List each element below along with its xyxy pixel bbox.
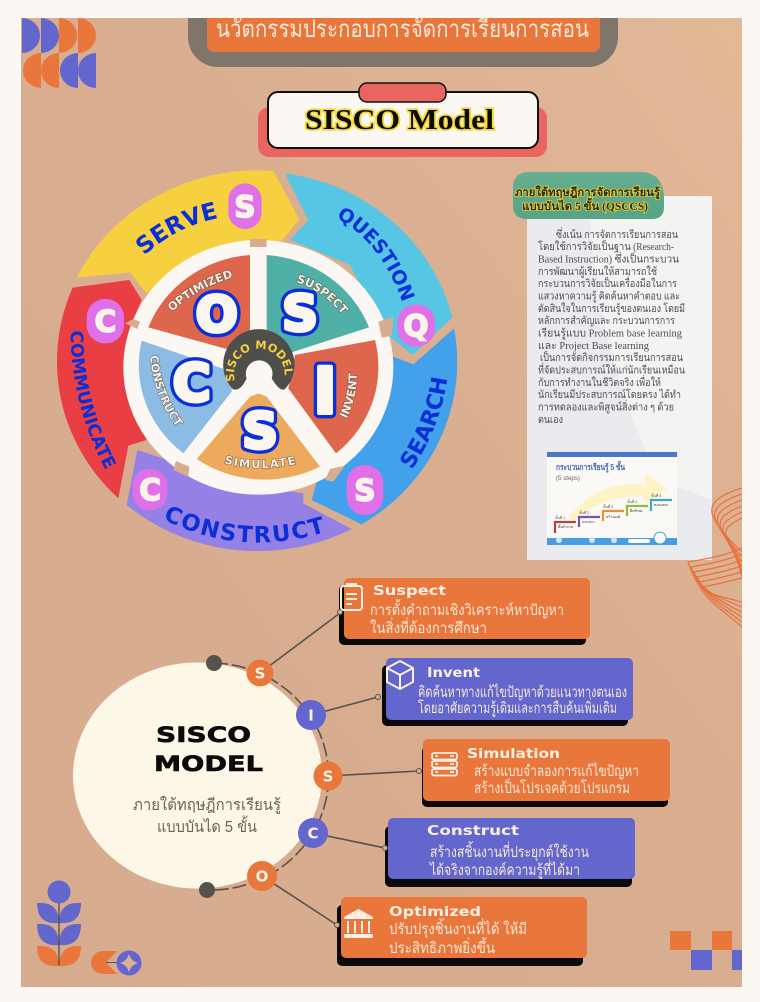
letter I: I	[313, 354, 337, 428]
title banner: นวัตกรรมประกอบการจัดการเรียนการสอน	[216, 16, 589, 43]
figure: 5 steps learning process: (5 steps)	[556, 475, 580, 482]
card: Optimized: ประสิทธิภาพยิ่งขึ้น	[389, 937, 495, 957]
card: Construct: ได้จริงจากองค์ความรู้ที่ได้มา	[429, 859, 580, 879]
panel heading: แบบบันได 5 ขั้น (QSCCS)	[522, 197, 648, 213]
dot bottom	[199, 882, 215, 898]
letter O: O	[196, 285, 238, 343]
arrow: serve	[77, 170, 299, 293]
circle subtitle: แบบบันได 5 ขั้น	[157, 815, 257, 836]
card: Simulation: Simulation	[467, 747, 560, 762]
figure: 5 steps learning process: ฝึกทักษะ	[630, 509, 643, 513]
panel body text: และ Project Base learning	[538, 341, 650, 352]
slice: simulate	[197, 393, 320, 480]
letter C: C	[173, 354, 211, 414]
hub	[223, 329, 294, 390]
icon: server	[432, 753, 457, 776]
card: Suspect: ในสิ่งที่ต้องการศึกษา	[370, 617, 487, 637]
figure: 5 steps learning process: ขั้นที่ 2	[579, 510, 589, 515]
SISCO wheel diagram	[56, 170, 458, 551]
pill C construct: C	[139, 473, 161, 507]
connector lines	[260, 613, 419, 925]
decoration: half circles top-left	[22, 18, 96, 88]
arrow: construct	[127, 450, 352, 551]
panel body text: แสวงหาความรู้ คิดค้นหาคำตอบ และ	[538, 290, 680, 302]
outer label question: QUESTION	[339, 208, 415, 301]
pill Q	[397, 304, 435, 347]
node O	[247, 861, 277, 891]
panel: QSCCS explanation	[513, 172, 712, 560]
card: Invent: โดยอาศัยความรู้เดิมและการสืบค้นเพิ่มเติม	[418, 697, 617, 717]
node C	[298, 818, 328, 848]
label construct inner: CONSTRUCT	[150, 355, 184, 426]
figure: 5 steps learning process: ขั้นที่ 3	[603, 504, 613, 509]
outer label search: SEARCH	[400, 377, 448, 468]
panel body text: กระบวนการวิจัยเป็นเครื่องมือในการ	[538, 276, 677, 290]
figure: 5 steps learning process: ขั้นที่ 1	[555, 515, 565, 520]
icon: clipboard	[341, 584, 362, 610]
outer label communicate: COMMUNICATE	[70, 331, 116, 470]
label suspect: SUSPECT	[296, 274, 350, 314]
dashed arc	[207, 663, 329, 890]
letter S top: S	[282, 284, 318, 342]
letter O: O	[196, 285, 238, 343]
outer label construct: CONSTRUCT	[166, 507, 322, 543]
node I: I	[308, 706, 314, 724]
card: Construct	[382, 818, 635, 887]
heading: SISCO Model: SISCO Model	[305, 104, 494, 136]
panel heading	[513, 172, 664, 219]
decoration: wave lines	[688, 488, 742, 627]
card: Optimized	[334, 897, 587, 966]
SISCO model diagram	[73, 613, 419, 925]
figure: 5 steps learning process: สร้างองค์	[606, 514, 621, 519]
dot top	[206, 655, 222, 671]
heading: SISCO Model	[258, 83, 547, 157]
panel body text: Based Instruction) ซึ่งเป็นกระบวน	[538, 252, 679, 266]
white ring	[123, 240, 393, 495]
card: Invent	[376, 658, 633, 726]
circle subtitle	[133, 796, 281, 836]
pill C construct	[133, 469, 167, 510]
slice: construct	[139, 341, 232, 453]
figure: 5 steps learning process: ขั้นที่ 5	[651, 493, 661, 498]
node I	[296, 700, 326, 730]
circle heading	[154, 723, 263, 776]
card: Suspect: การตั้งคำถามเชิงวิเคราะห์หาปัญหา	[370, 599, 564, 619]
icon: plant decoration	[37, 880, 81, 966]
pill C communicate	[87, 299, 124, 343]
pill S search	[347, 465, 383, 515]
slice: suspect	[267, 255, 369, 355]
label invent: INVENT	[339, 372, 358, 419]
node S: S	[323, 768, 333, 786]
node S	[246, 660, 274, 686]
panel body text: โดยใช้การวิจัยเป็นฐาน (Research-	[538, 239, 674, 253]
card: Construct: สร้างสชิ้นงานที่ประยุกต์ใช้งาน	[430, 841, 589, 862]
circle subtitle: ภายใต้ทฤษฎีการเรียนรู้	[133, 796, 281, 815]
decoration: pixel squares	[670, 931, 742, 970]
letter S bottom: S	[242, 402, 278, 460]
letter S top: S	[282, 284, 318, 342]
arrow: communicate	[57, 280, 147, 498]
slice: invent	[288, 340, 378, 453]
card: Construct: Construct	[427, 824, 519, 839]
card: Simulation: สร้างเป็นโปรเจคด้วยโปรแกรม	[474, 778, 630, 797]
panel body text: หลักการสำคัญและ กระบวนการการ	[538, 315, 675, 327]
icon: small shape decoration	[91, 950, 142, 976]
figure: 5 steps learning process: ตอบแทน	[654, 503, 668, 507]
card: Invent: Invent	[427, 666, 480, 681]
panel body text: นักเรียนมีประสบการณ์โดยตรง ได้ทำ	[538, 388, 681, 401]
figure: 5 steps learning process	[547, 452, 677, 545]
arrow: question	[285, 173, 452, 355]
figure: 5 steps learning process: แสวงหา	[582, 520, 595, 524]
figure: 5 steps learning process: กระบวนการเรียนรู้ 5 ขั้น	[556, 460, 625, 473]
outer label serve: SERVE	[136, 202, 217, 254]
panel body text: ซึ่งเน้น การจัดการเรียนการสอน	[556, 227, 678, 241]
node S	[314, 762, 342, 790]
card: Simulation: สร้างแบบจำลองการแก้ไขปัญหา	[474, 762, 639, 780]
icon: institution	[344, 909, 373, 938]
panel body text: เป็นการจัดกิจกรรมการเรียนการสอน	[540, 350, 683, 364]
panel heading: ภายใต้ทฤษฎีการจัดการเรียนรู้	[515, 185, 661, 200]
label simulate: SIMULATE	[224, 456, 296, 469]
letter S bottom: S	[242, 402, 278, 460]
panel body text: กับการทำงานในชีวิตจริง เพื่อให้	[538, 375, 661, 389]
figure: 5 steps learning process: ขั้นที่ 4	[627, 499, 637, 504]
panel body text: การทดลองและพิสูจน์สิ่งต่าง ๆ ด้วย	[538, 400, 674, 414]
arrow: search	[312, 328, 457, 524]
pill Q: Q	[404, 309, 428, 343]
cream circle	[73, 662, 322, 888]
panel body text: เรียนรู้แบบ Problem base learning	[538, 326, 683, 340]
letter I: I	[313, 354, 337, 428]
card: Simulation	[416, 739, 670, 807]
card: Suspect: Suspect	[373, 584, 446, 599]
card: Optimized: ปรับปรุงชิ้นงานที่ได้ ให้มี	[389, 918, 527, 939]
node C: C	[307, 824, 319, 842]
letter C: C	[173, 354, 211, 414]
node O: O	[256, 868, 268, 886]
circle heading: SISCO	[156, 723, 251, 747]
panel body text: ตัดสินใจในการเรียนรู้ของตนเอง โดยมี	[538, 302, 685, 315]
figure: 5 steps learning process: ตั้งคำถาม	[558, 524, 574, 529]
card: Invent: คิดค้นหาทางแก้ไขปัญหาด้วยแนวทางตนเอง	[418, 683, 627, 701]
hub label: SISCO MODEL	[226, 340, 293, 381]
panel body text: ตนเอง	[538, 415, 563, 426]
pill C communicate: C	[95, 305, 116, 339]
card: Optimized: Optimized	[389, 905, 481, 920]
pill S serve: S	[234, 190, 256, 224]
icon: cube	[387, 661, 413, 689]
pill S search: S	[354, 473, 376, 507]
panel body text: ที่จัดประสบการณ์ให้แก่นักเรียนเหมือน	[538, 362, 685, 376]
title banner	[188, 18, 618, 67]
slice: optimized	[148, 255, 250, 349]
node S: S	[255, 664, 265, 682]
panel body text: การพัฒนาผู้เรียนให้สามารถใช้	[538, 265, 657, 278]
card: Suspect	[338, 578, 590, 645]
pill S serve	[228, 183, 262, 229]
label optimized: OPTIMIZED	[168, 270, 232, 310]
circle heading: MODEL	[154, 752, 263, 776]
panel body text	[538, 227, 685, 426]
